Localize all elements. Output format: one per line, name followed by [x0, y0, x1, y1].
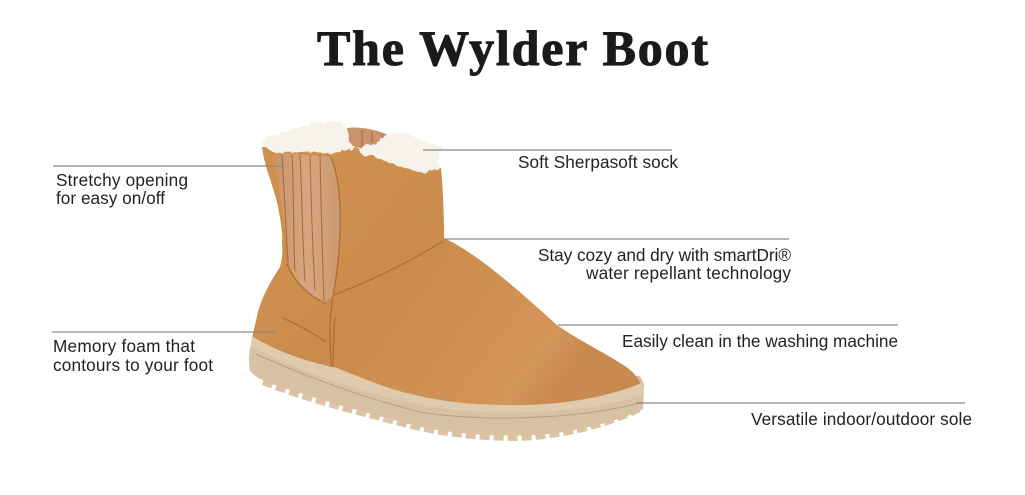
- label: Stretchy opening: Stretchy opening: [56, 170, 188, 190]
- label: smartDri: Stay cozy and dry with smartDri®: [538, 245, 791, 265]
- label: Stretchy opening: for easy on/off: [56, 188, 165, 208]
- label: Sherpasoft sock: Soft Sherpasoft sock: [518, 152, 678, 172]
- title: The Wylder Boot: [317, 20, 708, 76]
- leader line: Memory foam: [52, 331, 276, 333]
- illustration: boot: [249, 121, 644, 438]
- label: Memory foam: contours to your foot: [53, 355, 213, 375]
- boot upper: [252, 146, 641, 405]
- label: washing machine: Easily clean in the washing machine: [622, 331, 898, 351]
- boot sole welt: [251, 336, 644, 412]
- lining ribs: [362, 130, 382, 148]
- leader line: smartDri: [444, 238, 789, 240]
- leader line: washing machine: [558, 324, 898, 326]
- leader line: Sherpasoft sock: [423, 149, 672, 151]
- boot sole groove: [256, 354, 643, 418]
- boot inner lining: [347, 127, 391, 150]
- boot sherpa collar: [261, 121, 443, 173]
- label: sole: Versatile indoor/outdoor sole: [751, 409, 972, 429]
- leader line: Stretchy opening: [53, 165, 284, 167]
- boot elastic gusset: [275, 152, 341, 303]
- boot seams and ribs: [282, 155, 443, 370]
- label: smartDri: water repellant technology: [585, 263, 791, 283]
- boot sole treads: [263, 382, 640, 438]
- boot sole: [249, 336, 644, 436]
- label: Memory foam: Memory foam that: [53, 336, 195, 356]
- leader line: sole: [636, 402, 965, 404]
